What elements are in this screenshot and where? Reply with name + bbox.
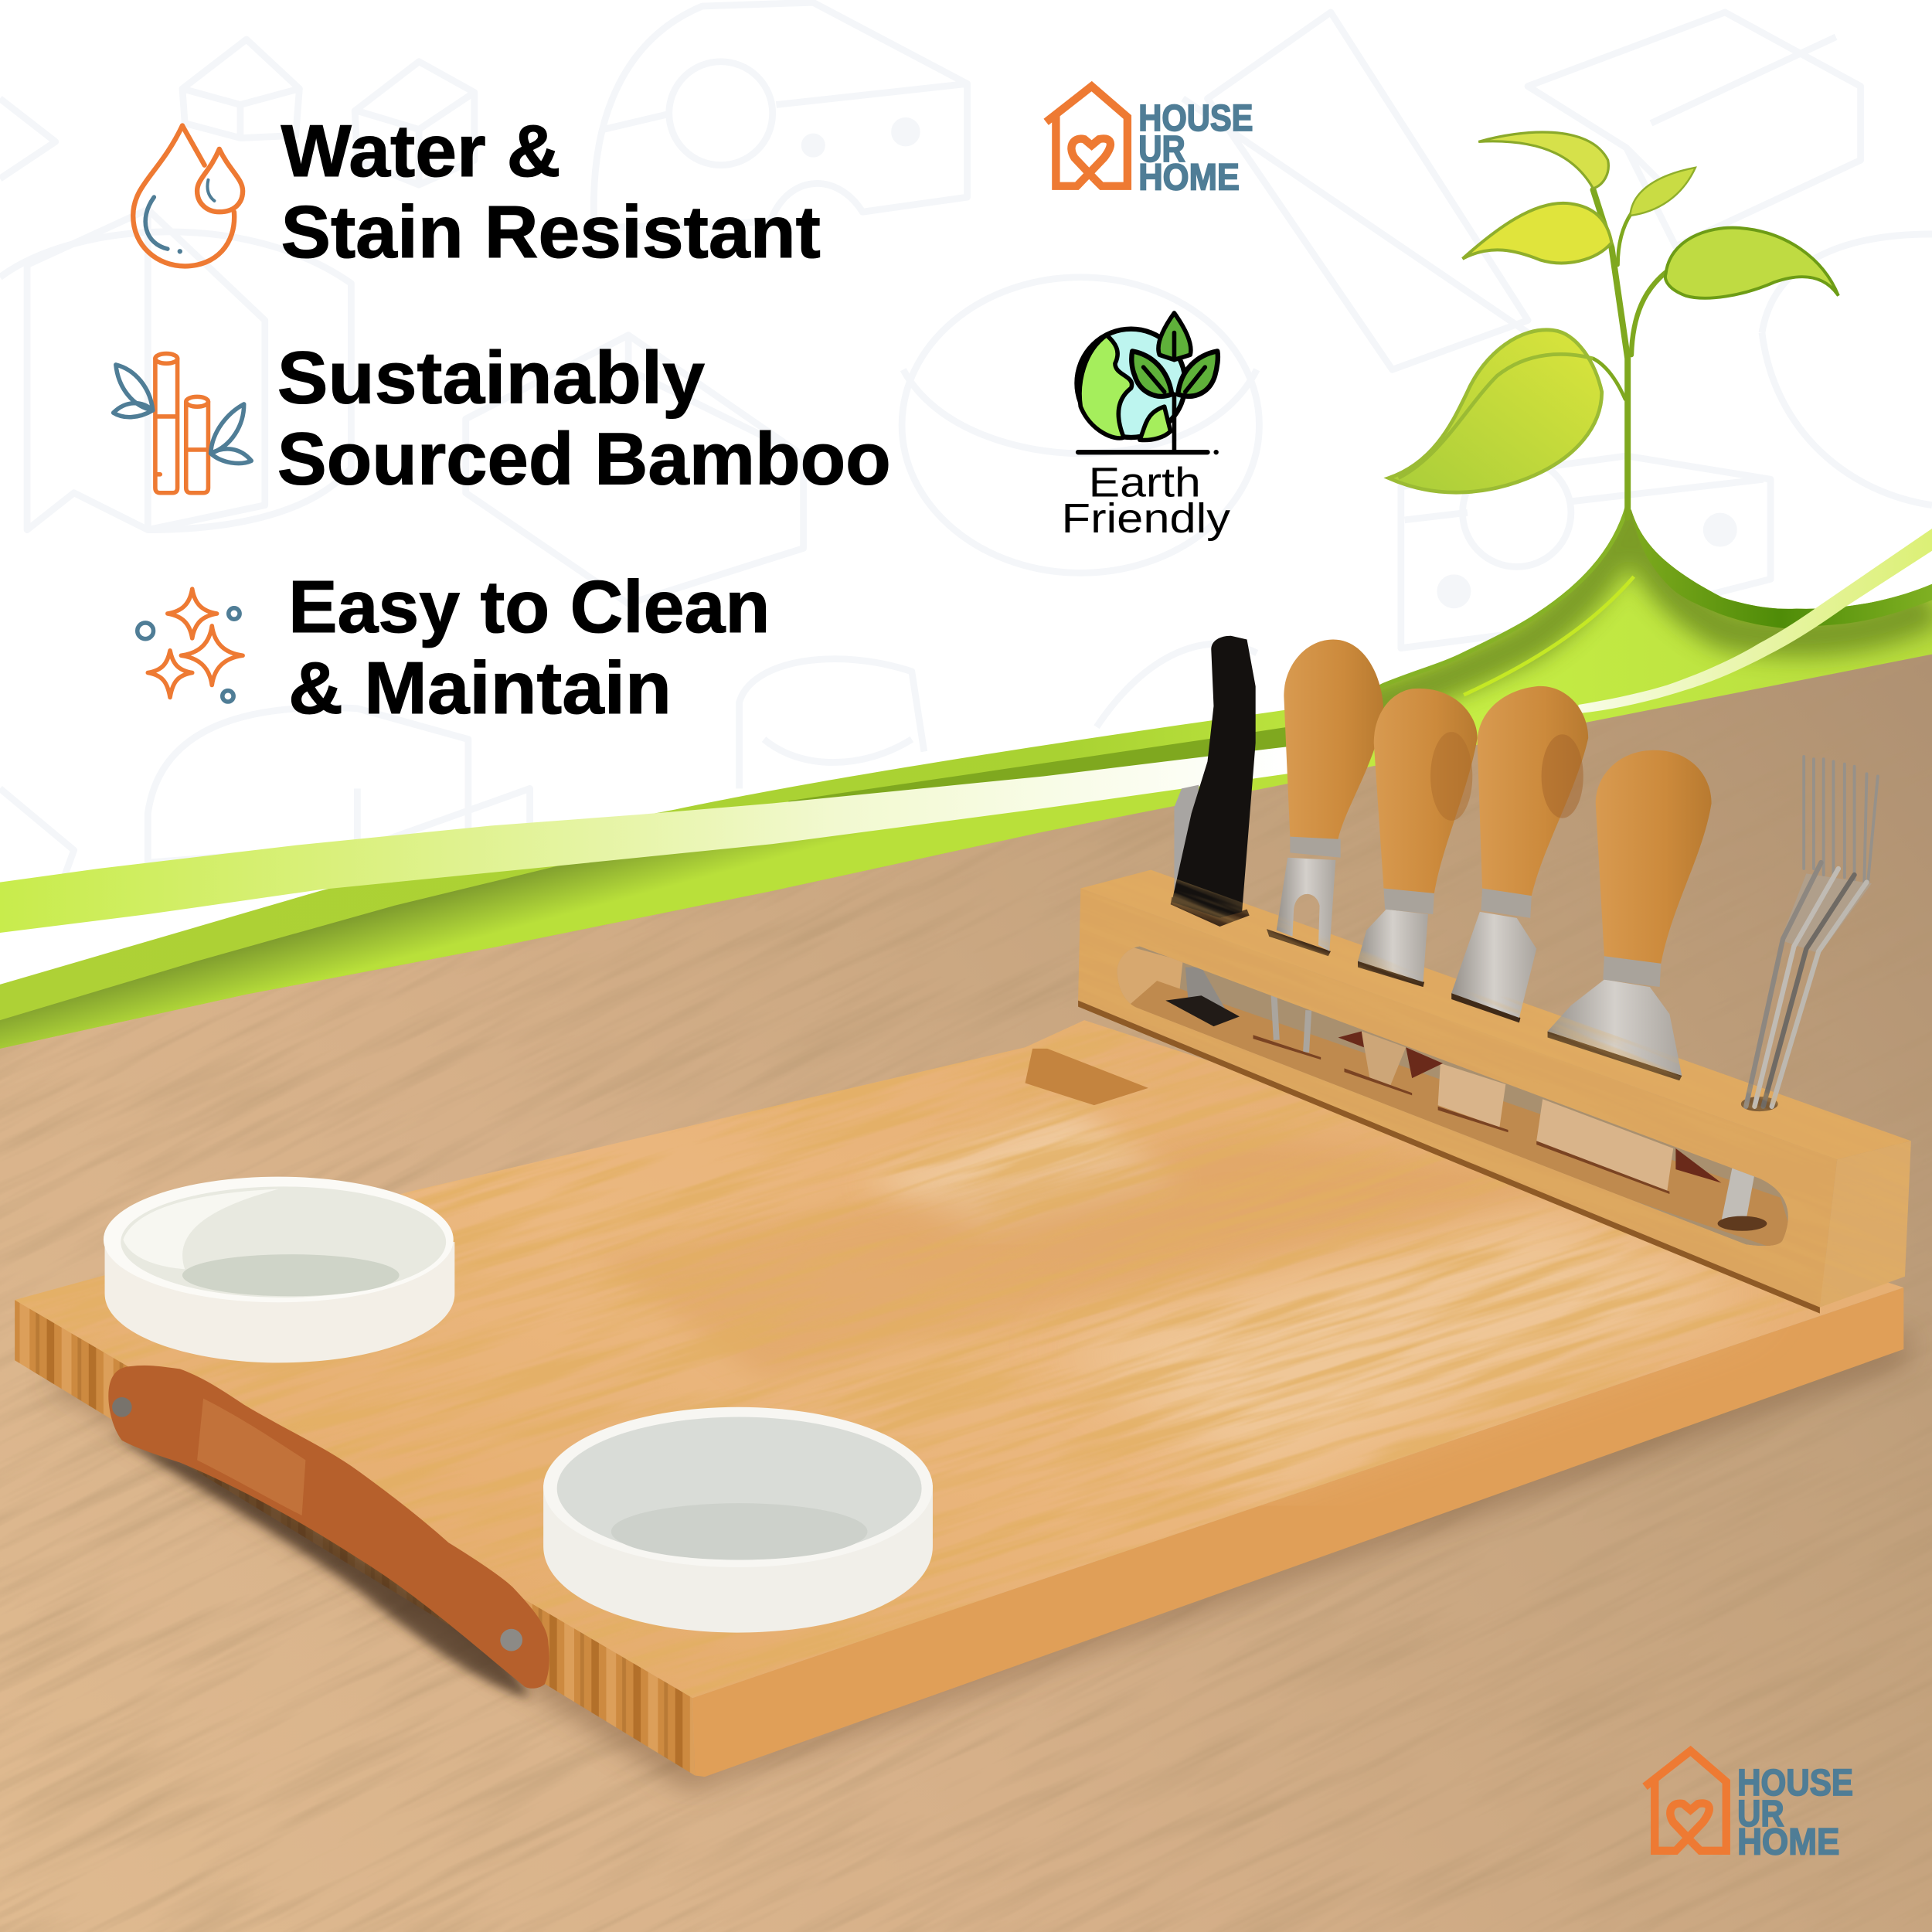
swoosh: pale right stripe	[1578, 529, 1932, 713]
logo: house ur home bottom	[1645, 1751, 1853, 1863]
icon: bamboo	[114, 354, 251, 493]
logo wordmark: UR	[1138, 129, 1185, 170]
heading: water and stain resistant: Stain Resistant	[281, 191, 821, 274]
swoosh: dark upper stripe	[788, 727, 1287, 813]
cheese fork	[1277, 639, 1383, 951]
ceramic dish: front	[543, 1407, 933, 1633]
holder top face	[1080, 870, 1911, 1159]
logo wordmark: HOUSE	[1737, 1763, 1853, 1804]
tool holder block	[1078, 636, 1911, 1314]
holder window view	[1109, 937, 1799, 1257]
logo wordmark: UR	[1737, 1794, 1784, 1835]
wooden table surface	[0, 654, 1932, 1932]
logo wordmark: HOME	[1138, 158, 1240, 199]
heading: water and stain resistant: Water &	[281, 110, 560, 192]
plant stems	[1594, 190, 1666, 518]
holder slots	[1171, 897, 1778, 1111]
board notch	[1026, 1049, 1148, 1105]
holder tools	[1172, 636, 1878, 1107]
label: earth friendly: Earth	[1089, 460, 1201, 506]
icon: water drops	[133, 126, 243, 266]
leaf: right	[1665, 228, 1838, 298]
logo wordmark: HOME	[1737, 1822, 1839, 1863]
swoosh: thin lime streak	[1464, 577, 1634, 695]
heading: easy to clean and maintain: & Maintain	[288, 647, 672, 730]
cheese knife four	[1548, 750, 1712, 1076]
heading: sustainably sourced bamboo: Sustainably	[277, 336, 705, 419]
feature 3: easy to clean and maintain	[138, 566, 770, 730]
window ledge	[1109, 981, 1799, 1257]
leather strap handle	[108, 1366, 549, 1698]
strap rivets	[112, 1397, 132, 1417]
holder front face	[1078, 889, 1837, 1308]
swoosh: lower dark band	[0, 752, 1287, 1049]
view through window: table	[1134, 946, 1788, 1246]
holder base shadow line	[1078, 1001, 1820, 1314]
label: earth friendly: Friendly	[1062, 495, 1230, 542]
leaf: large	[1389, 330, 1602, 492]
green swoosh wave	[0, 505, 1932, 1049]
feature 2: sustainably sourced bamboo	[114, 336, 891, 501]
board light patches	[591, 1109, 1762, 1478]
icon: sparkles	[138, 589, 243, 702]
swoosh: dark crescent under hump	[1631, 510, 1932, 628]
feature 1: water and stain resistant	[133, 110, 821, 274]
corkscrew	[1172, 636, 1256, 918]
cheese knife three	[1451, 686, 1588, 1018]
swoosh: pale band	[0, 747, 1287, 933]
forks	[1746, 757, 1878, 1107]
corkscrew silver arm	[1174, 785, 1199, 897]
board left side face	[15, 1300, 695, 1776]
icon: house with heart	[1645, 1751, 1726, 1851]
swoosh: main lime sweep	[0, 505, 1932, 1049]
window left inner wall	[1117, 947, 1182, 1004]
leaf: top	[1478, 132, 1608, 189]
icon: house with heart	[1046, 87, 1128, 186]
heading: sustainably sourced bamboo: Sourced Bamboo	[277, 418, 891, 501]
board top grain	[15, 1020, 1903, 1698]
swoosh: shading on cone	[1380, 509, 1932, 708]
board shadow	[49, 1331, 1910, 1789]
icon: globe with leaves	[1077, 313, 1218, 454]
holder end face	[1820, 1141, 1911, 1308]
swoosh: cone rim	[1287, 505, 1628, 709]
logo: house ur home top	[1046, 87, 1253, 199]
ledge holes	[1253, 1035, 1669, 1194]
heading: easy to clean and maintain: Easy to Clean	[288, 566, 770, 648]
board top surface	[15, 1020, 1903, 1698]
leaf: small	[1630, 168, 1696, 216]
holder surface grain	[1078, 870, 1911, 1308]
logo wordmark: HOUSE	[1138, 98, 1253, 139]
ceramic dish: back	[104, 1177, 454, 1362]
bamboo cheese board	[15, 636, 1911, 1789]
board front side face	[692, 1287, 1903, 1777]
plant sprout	[1389, 132, 1838, 518]
leaf: yellow	[1463, 203, 1611, 263]
cheese knife two	[1358, 689, 1478, 982]
earth friendly badge	[1062, 313, 1230, 542]
reflected blades	[1438, 1063, 1673, 1192]
